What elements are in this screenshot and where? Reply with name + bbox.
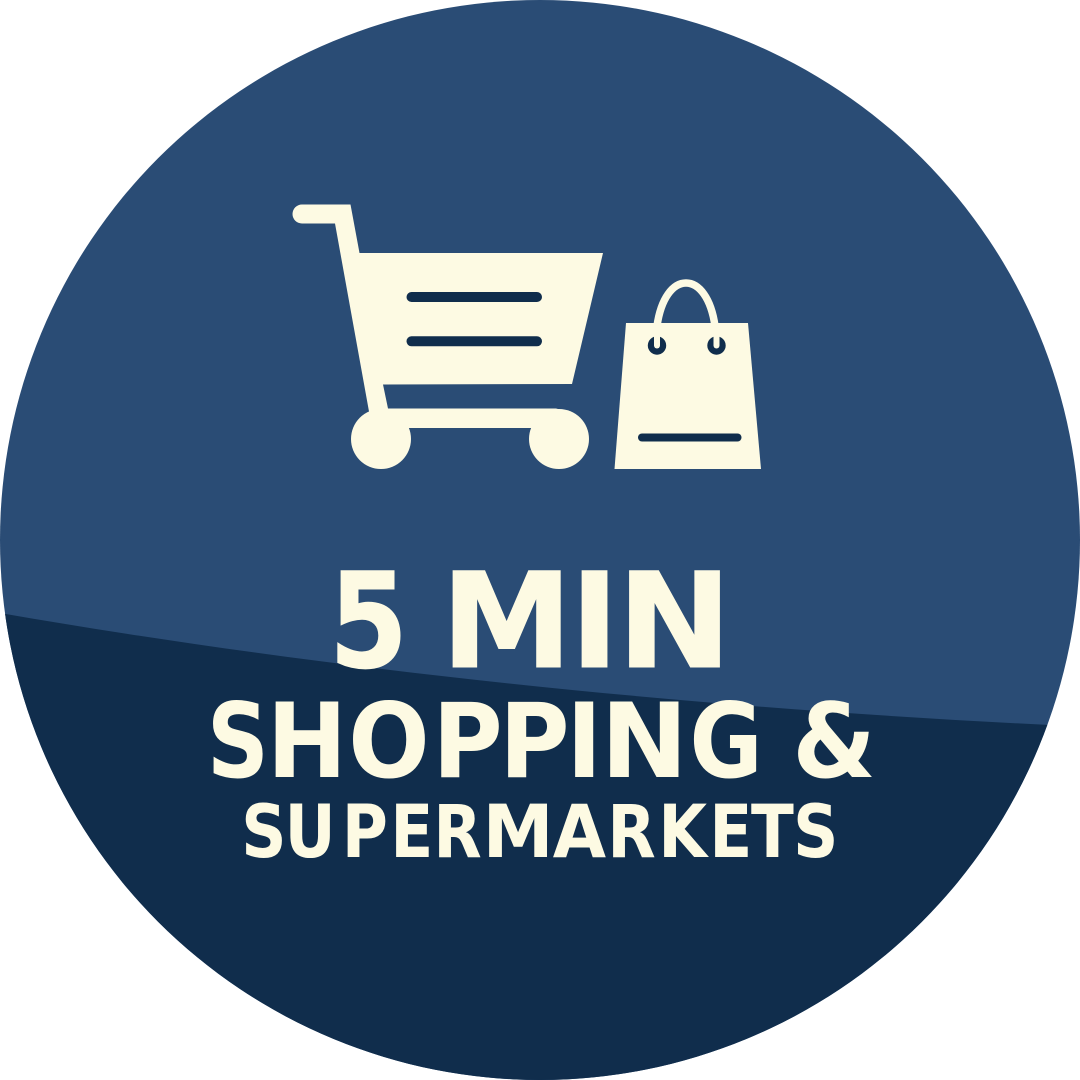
heading: 5 MIN: 5 bbox=[329, 545, 408, 699]
icon: shopping cart bbox=[292, 204, 603, 469]
heading: SUPERMARKETS: M bbox=[483, 791, 554, 875]
heading: 5 MIN: MI bbox=[400, 545, 619, 699]
heading: SHOPPING &: N bbox=[601, 683, 688, 802]
heading: 5 MIN: N bbox=[617, 545, 732, 699]
heading: SHOPPING &: S bbox=[207, 683, 269, 802]
heading: SHOPPING &: G bbox=[690, 683, 763, 802]
icon: shopping bag bbox=[614, 283, 761, 469]
heading: SUPERMARKETS: A bbox=[553, 791, 606, 875]
heading: SHOPPING &: HOPPI bbox=[267, 683, 602, 802]
heading: SHOPPING &: & bbox=[760, 683, 876, 802]
heading: SUPERMARKETS: RKETS bbox=[607, 791, 838, 875]
heading: SUPERMARKETS: SUPER bbox=[241, 791, 482, 875]
